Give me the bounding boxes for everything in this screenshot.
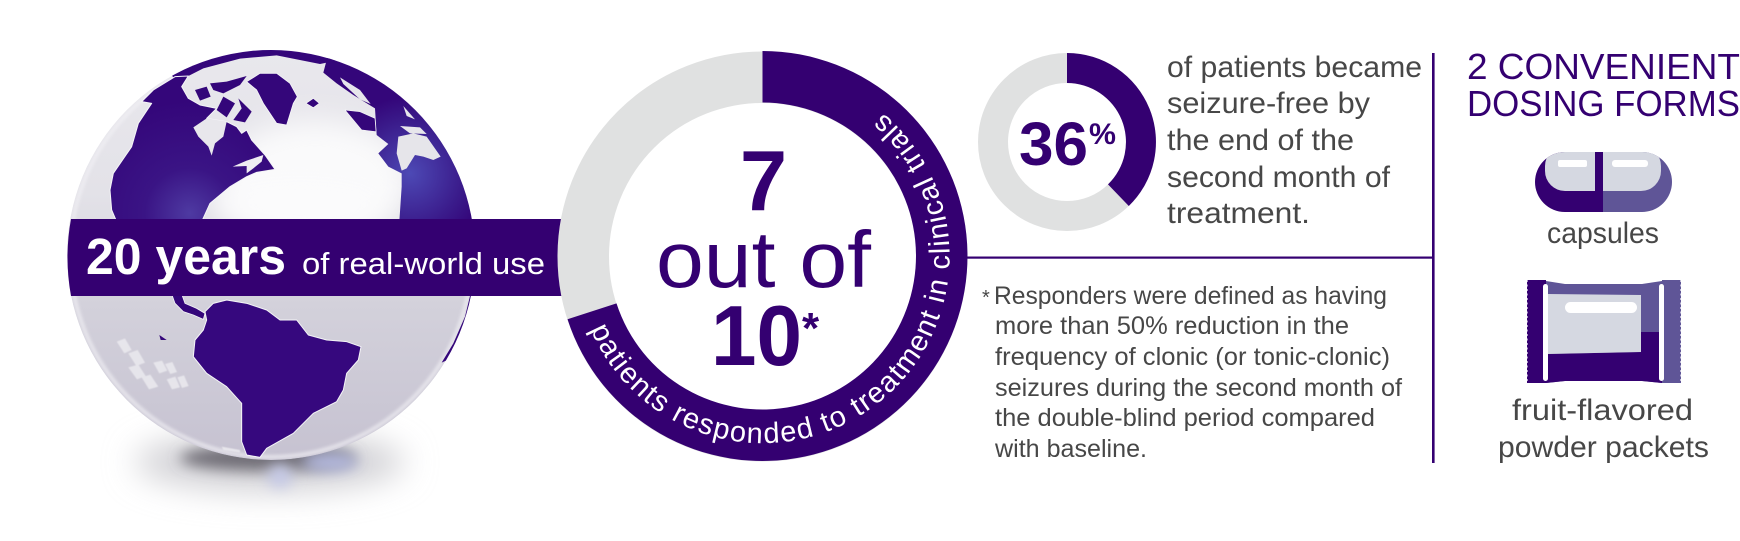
- footnote: seizures during the second month of: [995, 374, 1402, 402]
- label: capsules: capsules: [1547, 217, 1659, 250]
- globe ground shadow: [135, 432, 405, 492]
- scandinavian light streaks: [340, 77, 427, 134]
- icon: capsule: [1535, 146, 1672, 212]
- horizontal divider: [967, 256, 1434, 259]
- seizure-free text: [1167, 51, 1422, 230]
- small island: [159, 335, 167, 340]
- north america: [110, 76, 275, 222]
- donut remainder: [583, 77, 942, 436]
- number 10: 10: [711, 289, 802, 384]
- band headline: 20 years: [86, 228, 286, 285]
- footnote: the double-blind period compared: [995, 404, 1375, 432]
- gulf of st lawrence: [233, 155, 263, 173]
- label: powder packets: fruit-flavored: [1512, 394, 1693, 427]
- seizure-free text: second month of: [1167, 161, 1391, 194]
- vertical divider: [1432, 53, 1435, 463]
- icon: powder packet: [1527, 280, 1681, 383]
- footnote: *: [982, 287, 990, 309]
- europe and africa: [323, 58, 472, 219]
- footnote: with baseline.: [994, 435, 1147, 463]
- percent sign: %: [1089, 118, 1116, 151]
- curved caption: patients responded to treatment in clinical trials: [586, 115, 950, 444]
- arctic rim: [172, 50, 336, 78]
- footnote: [982, 282, 1402, 463]
- 36 value: 36: [1019, 110, 1088, 178]
- seizure-free text: of patients became: [1167, 51, 1422, 84]
- hudson bay: [193, 118, 227, 156]
- globe sphere: [67, 50, 472, 460]
- out of: out of: [656, 215, 872, 304]
- central america: [172, 294, 205, 319]
- iceland: [306, 98, 319, 108]
- large donut: 7 out of 10: [558, 51, 968, 462]
- footnote: Responders were defined as having: [994, 282, 1387, 310]
- donut filled arc: [568, 51, 967, 461]
- small donut filled arc: [1067, 53, 1156, 206]
- globe with shadow: [67, 33, 500, 492]
- small donut: 36%: [993, 53, 1156, 216]
- heading: dosing forms: 2 CONVENIENT: [1467, 46, 1740, 87]
- southern hemisphere reflections and land: [117, 293, 493, 457]
- africa edge: [442, 296, 471, 363]
- seizure-free text: seizure-free by: [1167, 87, 1370, 120]
- band subtext: of real-world use: [302, 246, 545, 281]
- asterisk: *: [802, 304, 820, 353]
- footnote: frequency of clonic (or tonic-clonic): [995, 343, 1390, 371]
- band: 20 years of real-world use: [68, 219, 565, 296]
- seizure-free text: the end of the: [1167, 124, 1354, 157]
- northern hemisphere land: [110, 50, 472, 219]
- heading: dosing forms: [1467, 46, 1740, 124]
- small donut remainder: [993, 68, 1141, 216]
- south america: [193, 300, 361, 457]
- label: powder packets: powder packets: [1498, 431, 1709, 464]
- number 7: 7: [740, 134, 787, 229]
- greenland: [247, 73, 297, 125]
- arctic islands: [195, 76, 252, 122]
- footnote: more than 50% reduction in the: [995, 312, 1349, 340]
- label: powder packets: [1498, 394, 1709, 464]
- british isles: [345, 110, 376, 132]
- mediterranean: [397, 133, 441, 171]
- seizure-free text: treatment.: [1167, 197, 1310, 230]
- window reflections: [117, 338, 240, 452]
